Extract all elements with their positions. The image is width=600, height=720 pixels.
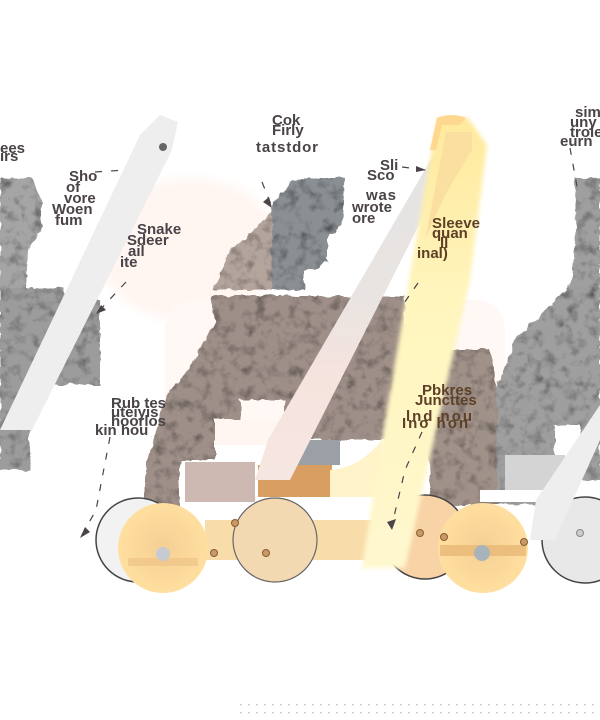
illustration: wheel bolts xyxy=(210,520,584,556)
label: yellow handle text: Sleeve xyxy=(432,215,480,232)
label: top centre xyxy=(256,112,318,156)
arrow: lower left label xyxy=(80,437,110,538)
label: ear text xyxy=(0,140,25,165)
illustration: left wooden wheel xyxy=(118,503,208,593)
label: left shoulder: fum xyxy=(55,212,82,229)
label: head: Sli xyxy=(380,157,398,174)
label: left shoulder: Woen xyxy=(52,201,93,218)
arrow: top centre to head xyxy=(262,182,272,208)
illustration: centre grey plush head xyxy=(272,178,345,290)
label: top right xyxy=(560,104,600,150)
illustration: right grey plush xyxy=(497,178,600,505)
panel: cream backdrop xyxy=(98,178,505,435)
label: head: Sco xyxy=(367,167,395,184)
label: top right: eurn xyxy=(560,133,593,150)
label: lower left: uteiyis xyxy=(111,404,159,421)
label: lower left: hoorlos xyxy=(111,413,166,430)
label: lower right: Pbkres xyxy=(422,382,472,399)
label: ear text: irs xyxy=(0,148,18,165)
label: left shoulder: Sho xyxy=(69,168,97,185)
illustration: left grey plush xyxy=(0,178,100,470)
illustration: right wooden wheel xyxy=(438,503,528,593)
label: top centre: Cok xyxy=(272,112,301,129)
label: ear softness xyxy=(120,221,181,271)
illustration: orange wood seat xyxy=(258,440,382,519)
label: ear softness: Sdeer xyxy=(127,232,169,249)
label: yellow handle text: inal) xyxy=(417,245,448,262)
label: head: was xyxy=(365,187,396,204)
arrow: left shoulder xyxy=(95,170,125,172)
label: lower left: kin hou xyxy=(95,422,148,439)
label: lower right: lnd nou xyxy=(406,408,472,425)
label: head: ore xyxy=(352,210,375,227)
illustration: dark-rimmed wheels xyxy=(96,495,600,583)
illustration: centre brown plush xyxy=(145,212,500,510)
illustration: left white handle xyxy=(0,115,178,430)
illustration: yellow base board xyxy=(205,520,395,560)
label: lower left xyxy=(95,395,166,439)
label: yellow handle text: ll xyxy=(440,235,448,252)
arrow: head label xyxy=(402,166,426,172)
label: top right: uny xyxy=(570,114,597,131)
label: lower right xyxy=(402,382,477,432)
illustration: grey fur under seat xyxy=(270,440,340,465)
label: lower right: Ino hon xyxy=(402,415,468,432)
label: top centre: tatstdor xyxy=(256,139,318,156)
label: lower left: Rub tes xyxy=(111,395,166,412)
label: yellow handle text: quan xyxy=(432,225,468,242)
label: head xyxy=(351,157,398,227)
label: ear text: ees xyxy=(0,140,25,157)
arrow: lower right label xyxy=(387,432,422,530)
label: ear softness: Snake xyxy=(137,221,181,238)
illustration: yellow handle xyxy=(362,115,487,568)
illustration: walker body panels xyxy=(185,420,565,502)
label: yellow handle text xyxy=(417,215,480,262)
label: lower right: Juncttes xyxy=(415,392,477,409)
label: left shoulder xyxy=(52,168,97,229)
label: top centre: Firly xyxy=(272,122,304,139)
label: head: wrote xyxy=(351,199,392,216)
label: ear softness: ite xyxy=(120,254,138,271)
decorative: dot pattern xyxy=(240,704,600,720)
arrow: right top label xyxy=(570,148,578,192)
arrow: yellow handle label xyxy=(402,283,418,306)
label: left shoulder: vore xyxy=(64,190,96,207)
illustration: right handle xyxy=(530,405,600,540)
label: ear softness: ail xyxy=(128,243,145,260)
illustration: centre handle xyxy=(255,130,462,480)
arrow: ear label xyxy=(96,282,126,314)
label: left shoulder: of xyxy=(66,179,81,196)
